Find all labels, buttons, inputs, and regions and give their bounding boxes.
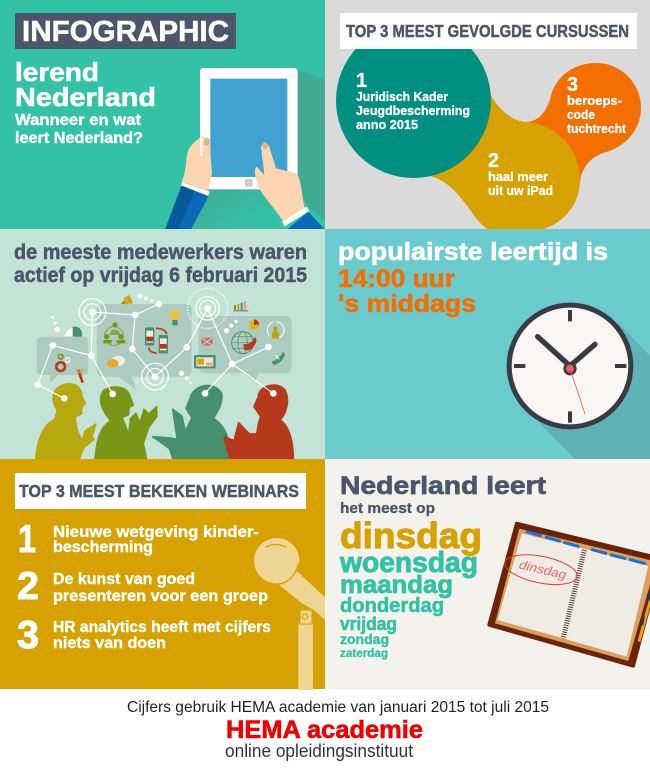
heading: lerend Nederland — [15, 57, 156, 112]
word list: weekdays ranked: zaterdag — [340, 646, 388, 660]
small icons — [56, 295, 285, 383]
panel: most active day — [0, 229, 325, 460]
highlighted time — [338, 265, 476, 318]
speech bubbles — [37, 304, 292, 391]
panel: top 3 webinars — [0, 459, 325, 690]
heading: de meeste medewerkers waren — [14, 241, 307, 264]
footer note: Cijfers gebruik HEMA academie van januari 2015 tot juli 2015 — [127, 699, 549, 716]
course 2 label: uit uw iPad — [488, 184, 553, 198]
webinar 2 — [17, 565, 268, 608]
word list: weekdays ranked: donderdag — [340, 595, 444, 617]
illustration: network of people — [34, 288, 293, 460]
webinar 3: HR analytics heeft met cijfers — [53, 619, 271, 636]
logo: HEMA academie — [225, 716, 423, 761]
subheading: het meest op — [340, 500, 435, 517]
heading: Nederland leert: Nederland leert — [340, 472, 547, 500]
webinar 1 — [18, 518, 259, 561]
word list: weekdays ranked: maandag — [340, 571, 453, 599]
course 1 label: 1 — [356, 70, 367, 92]
heading badge — [340, 13, 637, 49]
logo: HEMA academie: online opleidingsinstituut — [225, 741, 413, 761]
heading: lerend Nederland: Nederland — [15, 82, 156, 112]
webinar 1: bescherming — [53, 539, 153, 556]
panel: intro — [0, 0, 325, 230]
blob 1: teal — [336, 49, 491, 178]
webinar 1: 1 — [18, 518, 36, 561]
panel: weekdays — [325, 459, 650, 689]
webinar 1: Nieuwe wetgeving kinder- — [53, 524, 259, 541]
course 2 label: haal meer — [488, 170, 548, 184]
people silhouettes — [36, 384, 293, 460]
panel: popular time — [325, 229, 650, 459]
icon: clock — [507, 303, 650, 459]
word list: weekdays ranked: dinsdag — [340, 515, 482, 556]
heading badge — [15, 473, 306, 509]
course 3 label — [567, 74, 627, 136]
subheading: leert Nederland? — [15, 130, 143, 147]
panel: top 3 courses — [325, 0, 650, 232]
blob 3: orange — [525, 63, 641, 182]
word list: weekdays ranked: woensdag — [339, 547, 478, 579]
word list: weekdays ranked: vrijdag — [340, 614, 397, 634]
course 1 label: anno 2015 — [356, 118, 418, 132]
heading — [14, 241, 307, 287]
webinar 2: De kunst van goed — [53, 571, 195, 588]
icon: agenda: dinsdag — [518, 558, 568, 582]
webinar 3: 3 — [17, 614, 39, 657]
title badge: INFOGRAPHIC: INFOGRAPHIC — [22, 16, 229, 48]
heading badge: TOP 3 MEEST BEKEKEN WEBINARS — [19, 481, 299, 501]
blob 2: gold — [430, 94, 580, 229]
heading: actief op vrijdag 6 februari 2015 — [14, 264, 307, 287]
blob chart: courses — [336, 49, 641, 229]
icon: tablet with hands — [165, 68, 325, 230]
course 3 label: tuchtrecht — [567, 122, 627, 136]
heading: lerend Nederland: lerend — [15, 57, 99, 87]
course 1 label: Juridisch Kader — [356, 90, 448, 104]
icon: agenda — [489, 523, 650, 666]
webinar 3: niets van doen — [53, 635, 166, 652]
webinar 2: presenteren voor een groep — [53, 588, 268, 605]
subheading — [15, 112, 143, 147]
course 1 label: Jeugdbescherming — [356, 104, 470, 118]
course 2 label: 2 — [488, 150, 499, 172]
heading: populairste leertijd: populairste leertijd is — [338, 238, 608, 266]
icon: microphone — [254, 538, 325, 690]
subheading: Wanneer en wat — [15, 112, 142, 129]
network nodes — [34, 293, 277, 402]
course 3 label: beroeps- — [567, 94, 622, 108]
webinar 3 — [17, 614, 271, 657]
course 1 label — [356, 70, 470, 132]
highlighted time: 's middags — [338, 290, 476, 318]
webinar 2: 2 — [17, 565, 39, 608]
word list: weekdays ranked: zondag — [340, 631, 389, 647]
course 2 label — [488, 150, 553, 198]
highlighted time: 14:00 uur — [338, 265, 455, 293]
word list: weekdays ranked — [339, 515, 482, 660]
course 3 label: code — [567, 108, 595, 122]
course 3 label: 3 — [567, 74, 578, 96]
network lines — [38, 288, 273, 398]
logo: HEMA academie: HEMA academie — [226, 716, 423, 744]
